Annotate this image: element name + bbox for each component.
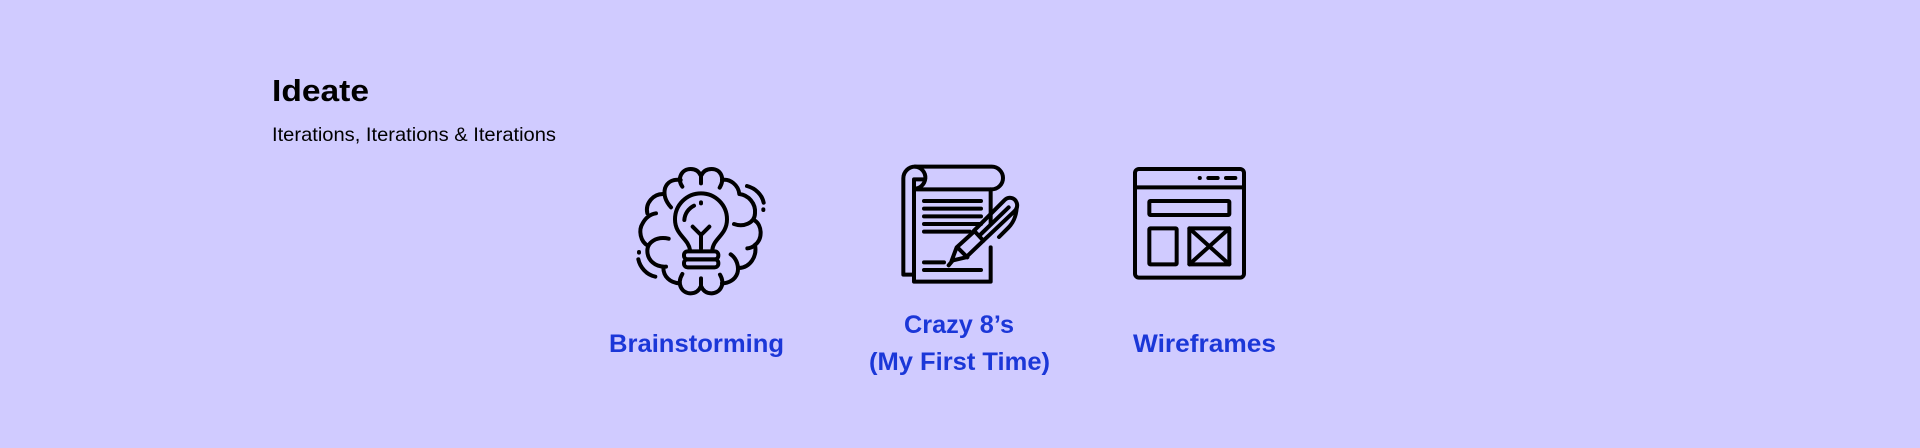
label: Crazy 8's (My First Time): (My First Time) — [869, 348, 1050, 376]
label: Wireframes: Wireframes — [1133, 330, 1276, 358]
subtitle: Iterations, Iterations & Iterations — [272, 124, 556, 146]
label: Brainstorming: Brainstorming — [609, 330, 784, 358]
label: Crazy 8's (My First Time) — [869, 311, 1050, 376]
icon: brain with light bulb — [638, 169, 764, 293]
icon: wireframe browser window — [1135, 169, 1244, 278]
label: Crazy 8's (My First Time): Crazy 8’s — [904, 311, 1014, 339]
icon: notepad with pen — [903, 167, 1017, 282]
title: Ideate — [272, 73, 369, 108]
